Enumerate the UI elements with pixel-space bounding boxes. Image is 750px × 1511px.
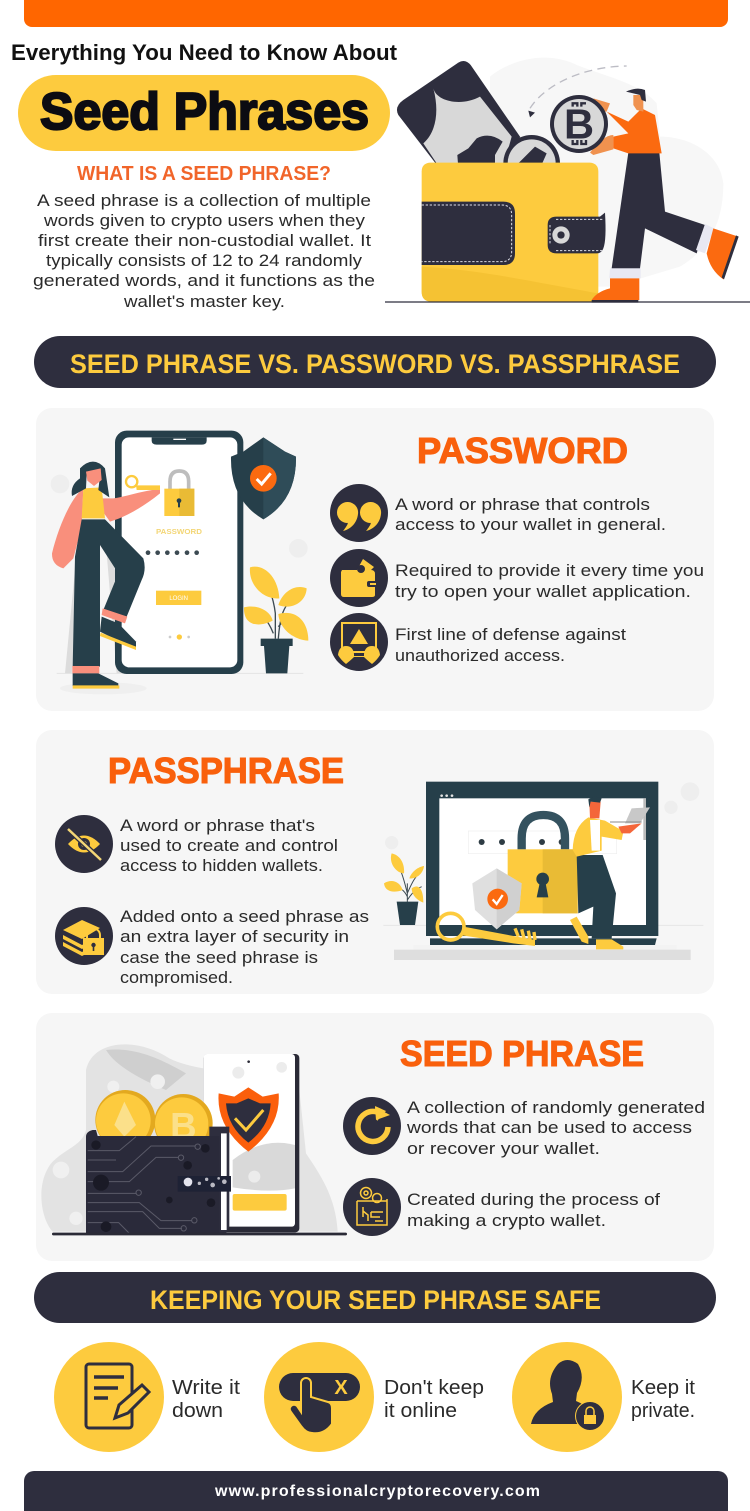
banner: keeping your seed phrase safe: KEEPING YOUR SEED PHRASE SAFE [150, 1285, 601, 1315]
intro paragraph: words given to crypto users when they [43, 211, 366, 230]
text: hidden wallets: used to create and control [120, 836, 338, 855]
banner: keeping your seed phrase safe [34, 1272, 716, 1323]
intro paragraph: first create their non-custodial wallet. It [38, 231, 371, 250]
icon: circuit wallet [343, 1178, 401, 1236]
heading: password: PASSWORD [417, 430, 628, 471]
icon: note and pencil [86, 1364, 149, 1428]
intro paragraph: generated words, and it functions as the [33, 271, 375, 290]
text: first line of defense [395, 625, 626, 665]
panel: passphrase [36, 730, 714, 994]
text: password access: A word or phrase that controls [395, 495, 650, 514]
text: password access [395, 495, 666, 534]
banner: seed phrase vs password vs passphrase: SEED PHRASE VS. PASSWORD VS. PASSPHRASE [70, 349, 680, 379]
tip: write it down: Write it [172, 1377, 240, 1399]
heading: seed phrase: SEED PHRASE [400, 1033, 644, 1074]
subheading: what is a seed phrase: WHAT IS A SEED PHRASE? [77, 163, 331, 185]
title pill: Seed Phrases: Seed Phrases [40, 83, 369, 141]
text: randomly generated words: A collection of randomly generated [407, 1098, 705, 1117]
tip: write it down: down [172, 1400, 223, 1422]
text: first line of defense: First line of defense against [395, 625, 626, 644]
text: hidden wallets: A word or phrase that's [120, 816, 315, 835]
tip: don't keep it online: Don't keep [384, 1377, 484, 1399]
footer bar with website [24, 1471, 728, 1511]
icon: hidden eye [55, 815, 113, 873]
icon: wallet [330, 549, 388, 607]
text: hidden wallets [120, 816, 338, 875]
icon: hand tapping close button [279, 1373, 360, 1433]
intro paragraph: A seed phrase is a collection of multiple [37, 191, 371, 210]
text: created during wallet creation [407, 1190, 660, 1230]
text: randomly generated words: or recover your wallet. [407, 1139, 600, 1158]
text: created during wallet creation: Created during the process of [407, 1190, 660, 1209]
text: randomly generated words: words that can be used to access [406, 1118, 692, 1137]
text: password required: Required to provide it every time you [395, 561, 704, 580]
text: extra layer of security: compromised. [120, 968, 233, 987]
text: password access: access to your wallet in general. [395, 515, 666, 534]
illustration: woman with phone, key and shield [51, 431, 308, 694]
text: extra layer of security: Added onto a seed phrase as [120, 907, 369, 926]
heading: passphrase: PASSPHRASE [108, 750, 344, 791]
illustration: man putting bitcoin into wallet: B [564, 101, 594, 148]
tip: keep it private: Keep it [631, 1377, 695, 1399]
illustration: circuit wallet with coins and phone [41, 1044, 347, 1235]
footer bar with website: www.professionalcryptorecovery.com [214, 1483, 540, 1500]
text: first line of defense: unauthorized access. [395, 646, 565, 665]
text: randomly generated words [406, 1098, 705, 1158]
banner: seed phrase vs password vs passphrase [34, 336, 716, 388]
text: hidden wallets: access to hidden wallets. [120, 856, 323, 875]
title: kicker: Everything You Need to Know About [11, 40, 398, 65]
text: extra layer of security: case the seed phrase is [120, 948, 318, 967]
illustration: woman with phone, key and shield: PASSWORD [156, 527, 202, 536]
illustration: monitor with padlock and man [383, 782, 703, 960]
icon: person with padlock [531, 1360, 604, 1430]
icon: recovery arrow [343, 1097, 401, 1155]
title pill: Seed Phrases [18, 75, 390, 151]
icon: layers with padlock [55, 907, 113, 965]
icon: hand tapping close button: X [334, 1377, 348, 1399]
text: password required: try to open your wallet application. [395, 582, 691, 601]
icon: quotation mark [330, 484, 388, 542]
intro paragraph: wallet's master key. [123, 292, 285, 311]
tip: don't keep it online [264, 1342, 484, 1452]
intro paragraph: typically consists of 12 to 24 randomly [46, 251, 363, 270]
illustration: woman with phone, key and shield: LOGIN [169, 596, 188, 602]
tip: keep it private: private. [631, 1400, 695, 1422]
panel: seed phrase [36, 1013, 714, 1261]
illustration: man putting bitcoin into wallet [385, 58, 750, 303]
intro paragraph [33, 191, 375, 311]
text: extra layer of security: an extra layer of security in [120, 927, 349, 946]
tip: write it down [54, 1342, 240, 1452]
top orange bar [24, 0, 728, 27]
illustration: circuit wallet with coins and phone: B [170, 1105, 197, 1146]
text: password required [395, 561, 704, 601]
text: created during wallet creation: making a crypto wallet. [407, 1211, 606, 1230]
text: extra layer of security [120, 907, 369, 987]
icon: warning screen with hands [330, 613, 388, 671]
panel: password [36, 408, 714, 711]
tip: keep it private [512, 1342, 695, 1452]
tip: don't keep it online: it online [384, 1400, 457, 1422]
